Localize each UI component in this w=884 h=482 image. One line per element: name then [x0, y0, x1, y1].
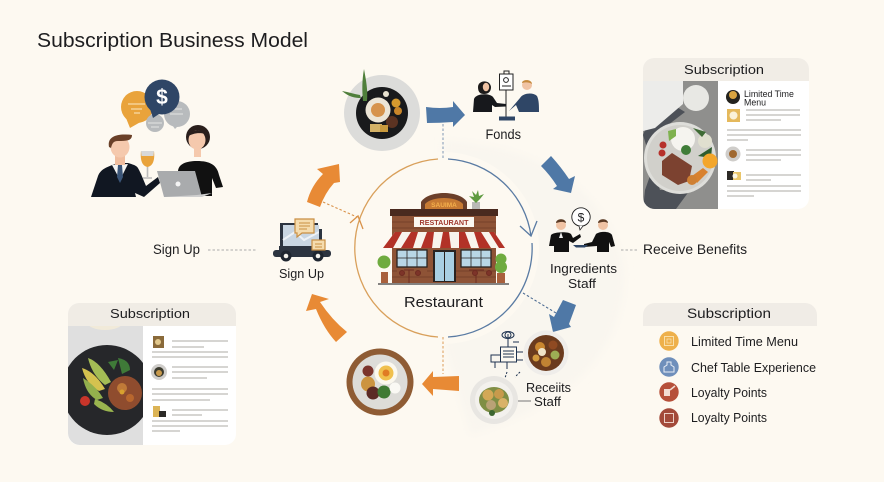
wall [392, 214, 496, 283]
dollar bubble: $ [578, 210, 585, 224]
list header: Subscription [687, 306, 771, 321]
list item: chef table experience [659, 357, 816, 377]
icon: yellow tile [727, 109, 740, 122]
label: receive benefits: Receive Benefits [643, 241, 747, 257]
label: receipts staff: Staff [534, 394, 561, 409]
arrow: orange bottom [422, 371, 459, 396]
label: sign up under truck: Sign Up [279, 266, 324, 281]
panel: subscription list [643, 303, 817, 428]
arrow: blue top [426, 101, 465, 127]
icon: orange ring arrowhead [350, 216, 363, 229]
icon: dish tile [153, 336, 164, 348]
icon: wine glass [141, 151, 154, 178]
list item: limited time menu [659, 331, 798, 351]
arrow: orange lower left [306, 294, 347, 342]
list item: chef table experience: Chef Table Experience [691, 361, 816, 375]
label: limited time menu: Menu [744, 98, 766, 108]
list item: loyalty points 2: Loyalty Points [691, 411, 767, 425]
icon: delivery truck [273, 219, 331, 262]
icon: receipts diagram [491, 332, 523, 378]
label: fonds: Fonds [486, 127, 521, 142]
sign stand [499, 71, 515, 120]
tray [573, 245, 588, 248]
restaurant sign: RESTAURANT [420, 218, 469, 227]
label: ingredients staff: Ingredients [550, 261, 618, 276]
label: limited time menu: Limited Time [744, 89, 794, 99]
list item: loyalty points [659, 382, 767, 402]
icon: camera tile [727, 171, 741, 180]
icon: grey speech bubbles [146, 101, 190, 132]
label: ingredients staff [550, 261, 618, 291]
icon: blue ring arrowhead [520, 221, 537, 236]
windows [397, 250, 491, 267]
arrow: orange upper left [307, 164, 340, 207]
food plate: receipts top [524, 330, 568, 376]
title: Subscription Business Model [37, 29, 308, 52]
list item: loyalty points 2 [659, 408, 767, 428]
card header [643, 58, 809, 81]
blue half of ring [448, 159, 532, 337]
placeholder text lines [727, 109, 801, 197]
card text rows [151, 336, 228, 432]
food plate: receipts bottom [470, 376, 518, 424]
card text rows [726, 89, 801, 197]
left staff figure [549, 219, 581, 252]
panel: subscription card left [62, 303, 236, 445]
panel: subscription card right [643, 58, 809, 209]
centre ring [350, 159, 537, 337]
icon: dish [726, 90, 740, 104]
door [433, 250, 456, 282]
food plate: top [342, 69, 420, 151]
icon: dollar speech bubble: $ [156, 86, 168, 109]
food plate: wooden [346, 348, 414, 416]
icon: handshake with sign [473, 71, 539, 120]
dotted connectors [208, 124, 638, 374]
woman figure [473, 81, 506, 112]
roof plant [469, 190, 484, 210]
card header: Subscription [684, 62, 764, 77]
placeholder text lines [152, 340, 228, 432]
label: receipts staff [526, 380, 571, 409]
list item: limited time menu: Limited Time Menu [691, 335, 798, 349]
arrow: blue lower right [549, 300, 576, 332]
photo: steak plate [643, 81, 718, 209]
icon: laptop [157, 171, 212, 197]
icon: restaurant building [378, 190, 509, 284]
right staff figure [584, 219, 615, 252]
arrow: blue upper right [541, 156, 575, 193]
icon: orange speech bubble [121, 91, 153, 128]
roof sign: SAUIMA [431, 202, 457, 209]
icon: note cards [295, 219, 325, 250]
photo: avocado plate [68, 326, 143, 445]
orange half of ring [355, 159, 438, 337]
striped awning [383, 232, 505, 248]
cafe tables [400, 270, 492, 283]
label: restaurant: Restaurant [404, 294, 484, 311]
woman [178, 125, 223, 196]
icon: bowl [726, 146, 740, 162]
potted trees [378, 254, 507, 283]
card header: Subscription [110, 306, 190, 321]
label: ingredients staff: Staff [568, 276, 596, 291]
label: receipts staff: Receiits [526, 380, 571, 395]
label: sign up left: Sign Up [153, 241, 200, 257]
icon: bowl [151, 364, 167, 380]
icon: staff with dollar bubble [549, 208, 615, 252]
list item: loyalty points: Loyalty Points [691, 386, 767, 400]
man [91, 134, 160, 197]
ground line [378, 283, 509, 285]
icon: food tile [153, 406, 166, 417]
card header [68, 303, 236, 326]
man figure [509, 80, 539, 112]
list header [643, 303, 817, 326]
icon: customers with chat bubbles [91, 80, 223, 197]
